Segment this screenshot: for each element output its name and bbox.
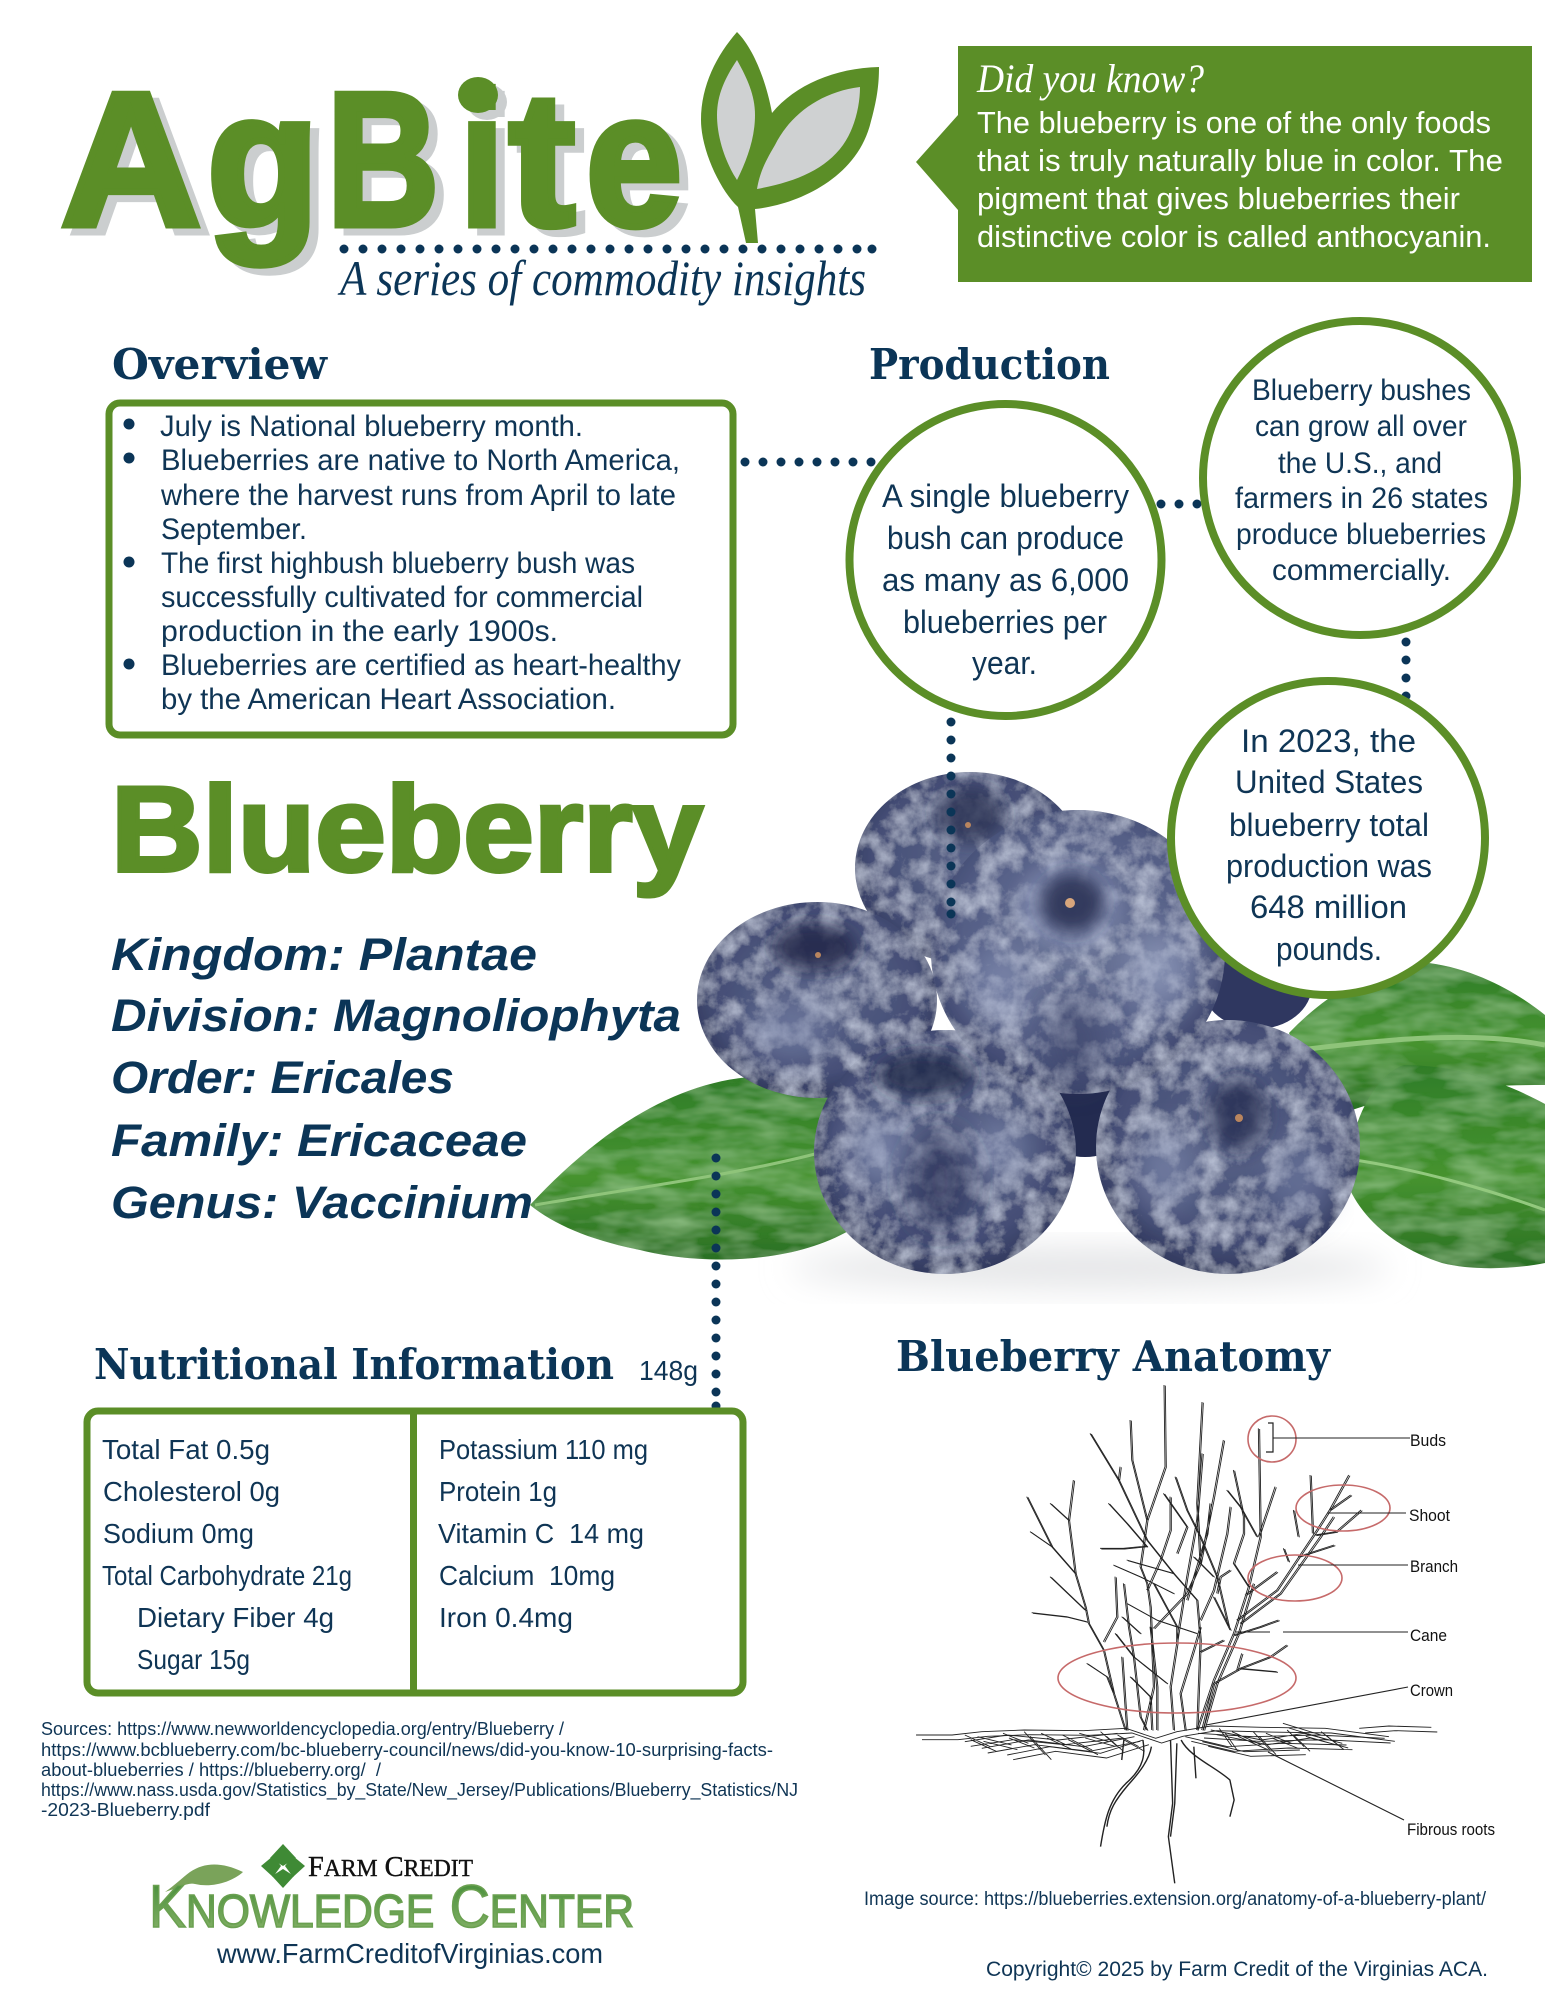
anatomy labels: Buds (1410, 1431, 1446, 1450)
berry: bottom right (1096, 1020, 1360, 1274)
panel: overview (109, 403, 733, 735)
berry: bottom left (814, 1030, 1076, 1274)
plant cane double line (1028, 1386, 1362, 1731)
logo wordmark shadow: i (469, 61, 513, 273)
heading: Production: Production (869, 340, 1110, 389)
sources text: https://www.nass.usda.gov/Statistics_by_State/New_Jersey/Publications/Blueberry_Statistics/NJ (41, 1780, 798, 1801)
leaf: upper right (1289, 963, 1545, 1110)
sources text: -2023-Blueberry.pdf (41, 1800, 211, 1820)
circle: single bush yield: year. (972, 645, 1037, 681)
berry ground shadow (790, 1248, 1390, 1288)
callout text: The blueberry is one of the only foods (977, 105, 1491, 140)
circle: single bush yield: blueberries per (903, 604, 1107, 640)
nutrition left column: Dietary Fiber 4g (137, 1602, 334, 1633)
taxonomy list: Family: Ericaceae (111, 1115, 527, 1166)
anatomy labels: Shoot (1409, 1506, 1450, 1525)
logo: Farm Credit Knowledge Center (149, 1844, 634, 1940)
overview text (160, 410, 681, 716)
berry: top centre (931, 810, 1225, 1094)
nutrition right column: Protein 1g (439, 1476, 557, 1507)
overview text: production in the early 1900s. (161, 615, 558, 648)
overview text: by the American Heart Association. (161, 683, 616, 716)
circle: total production: United States (1235, 764, 1423, 800)
anatomy labels (1407, 1431, 1495, 1839)
logo wordmark: g (207, 54, 319, 266)
overview text: July is National blueberry month. (160, 410, 583, 443)
logo wordmark: e (586, 54, 682, 266)
circle: total production: 648 million (1250, 889, 1407, 925)
sources text: Sources: https://www.newworldencyclopedia.org/entry/Blueberry / (41, 1719, 564, 1739)
leaf: lower right (1346, 1065, 1545, 1268)
icon: leaf (165, 1864, 243, 1892)
logo wordmark shadow: g (216, 61, 328, 273)
heading: Nutritional Information: Nutritional Information (94, 1340, 614, 1389)
callout text (977, 105, 1503, 254)
nutrition left column: Sugar 15g (137, 1644, 250, 1675)
Farm Credit wordmark: FARM CREDIT (308, 1851, 473, 1883)
dotted rule under logo (340, 244, 876, 254)
nutrition right column: Potassium 110 mg (439, 1434, 648, 1465)
nutrition box (87, 1411, 743, 1693)
image source: Image source: https://blueberries.extension.org/anatomy-of-a-blueberry-plant/ (864, 1889, 1487, 1910)
callout text: pigment that gives blueberries their (977, 181, 1460, 216)
red ellipses (1058, 1416, 1390, 1713)
circle: total production (1171, 681, 1485, 995)
heading: Blueberry: Blueberry (111, 761, 703, 897)
website: www.FarmCreditofVirginias.com (216, 1938, 603, 1969)
overview text: The first highbush blueberry bush was (161, 547, 635, 580)
Knowledge Center wordmark: KNOWLEDGE CENTER (149, 1873, 634, 1940)
diagram: plant anatomy (916, 1385, 1495, 1883)
dotted connector: overview to production (740, 458, 876, 466)
dotted connector: circle 1 to photo (946, 718, 956, 918)
leader lines (1206, 1438, 1410, 1820)
logo i dot (458, 77, 498, 113)
circle: states: Blueberry bushes (1252, 374, 1471, 407)
berry: left (697, 902, 937, 1098)
dotted connector: circle 2 to circle 3 (1402, 638, 1410, 700)
circle: single bush yield (850, 404, 1162, 716)
logo wordmark shadow: B (336, 61, 448, 273)
callout heading: Did you know? (976, 56, 1204, 101)
callout text: distinctive color is called anthocyanin. (977, 219, 1491, 254)
overview text: where the harvest runs from April to late (160, 479, 676, 512)
circle: states (1203, 321, 1517, 635)
taxonomy list: Kingdom: Plantae (111, 929, 537, 980)
callout: did you know (916, 46, 1532, 282)
callout text: that is truly naturally blue in color. The (977, 143, 1503, 178)
dotted connector: leaf to nutrition (712, 1154, 720, 1410)
main roots (1101, 1740, 1234, 1883)
anatomy labels: Branch (1410, 1557, 1458, 1576)
logo wordmark: i (460, 54, 504, 266)
sources text: about-blueberries / https://blueberry.org/ / (41, 1760, 381, 1780)
root mat second layer (922, 1728, 1437, 1760)
heading: Overview: Overview (112, 340, 328, 389)
sources text (41, 1719, 798, 1820)
nutrition right column (438, 1434, 648, 1633)
copyright: Copyright© 2025 by Farm Credit of the Virginias ACA. (986, 1958, 1488, 1981)
serving size: 148g (639, 1355, 698, 1386)
panel: nutrition table (87, 1411, 743, 1693)
taxonomy list: Order: Ericales (111, 1052, 454, 1103)
title logo: AgBite (61, 32, 879, 306)
circle: states: farmers in 26 states (1235, 482, 1488, 515)
berry: back (855, 772, 1085, 964)
nutrition left column: Total Fat 0.5g (102, 1434, 270, 1465)
circle: states: commercially. (1272, 554, 1451, 587)
photo: blueberries and leaves (530, 772, 1545, 1288)
logo i dot shadow (467, 84, 507, 120)
logo wordmark: B (327, 54, 439, 266)
overview text: Blueberries are certified as heart-healthy (161, 649, 681, 682)
circle: single bush yield: bush can produce (887, 520, 1124, 556)
callout box with pointer (916, 46, 1532, 282)
logo wordmark: t (509, 54, 575, 266)
nutrition left column (102, 1434, 352, 1675)
berry: back right (1202, 941, 1312, 1029)
leaf: left (530, 1076, 850, 1260)
circle: total production: pounds. (1276, 931, 1382, 967)
nutrition left column: Cholesterol 0g (103, 1476, 280, 1507)
nutrition right column: Calcium 10mg (439, 1560, 615, 1591)
bud bracket (1266, 1423, 1273, 1452)
icon: diamond flower (261, 1844, 305, 1888)
logo wordmark shadow: A (70, 61, 210, 273)
overview box (109, 403, 733, 735)
logo wordmark: A (61, 54, 201, 266)
plant canes and branches (1027, 1385, 1362, 1731)
circle: states: produce blueberries (1236, 518, 1486, 551)
anatomy labels: Crown (1410, 1681, 1453, 1700)
nutrition right column: Vitamin C 14 mg (438, 1518, 644, 1549)
anatomy labels: Cane (1410, 1626, 1447, 1645)
nutrition left column: Total Carbohydrate 21g (102, 1560, 352, 1591)
overview text: Blueberries are native to North America, (161, 444, 680, 477)
circle: single bush yield: as many as 6,000 (882, 562, 1129, 598)
circle: states: the U.S., and (1278, 447, 1442, 480)
circle: single bush yield: A single blueberry (882, 478, 1129, 514)
tagline: A series of commodity insights (337, 250, 866, 306)
anatomy labels: Fibrous roots (1407, 1820, 1495, 1839)
berry: dark filler (1035, 1073, 1135, 1157)
nutrition divider (410, 1411, 417, 1693)
circle: total production: In 2023, the (1241, 723, 1416, 759)
icon: sprout leaves (701, 32, 879, 243)
dotted connector: circle 1 to circle 2 (1156, 500, 1202, 508)
heading: Blueberry Anatomy: Blueberry Anatomy (896, 1332, 1332, 1381)
sources text: https://www.bcblueberry.com/bc-blueberry-council/news/did-you-know-10-surprising-facts- (41, 1740, 773, 1760)
logo wordmark shadow: t (518, 61, 584, 273)
plant crown and roots (916, 1723, 1437, 1883)
circle: states: can grow all over (1255, 410, 1467, 443)
taxonomy list (111, 929, 681, 1228)
circle: total production: production was (1226, 848, 1432, 884)
overview text: successfully cultivated for commercial (161, 581, 643, 614)
nutrition left column: Sodium 0mg (103, 1518, 254, 1549)
circle: total production: blueberry total (1229, 807, 1429, 843)
overview text: September. (161, 513, 307, 546)
overview bullets (124, 418, 134, 670)
nutrition right column: Iron 0.4mg (439, 1602, 573, 1633)
logo wordmark shadow: e (595, 61, 691, 273)
taxonomy list: Division: Magnoliophyta (111, 990, 681, 1041)
taxonomy list: Genus: Vaccinium (111, 1177, 533, 1228)
